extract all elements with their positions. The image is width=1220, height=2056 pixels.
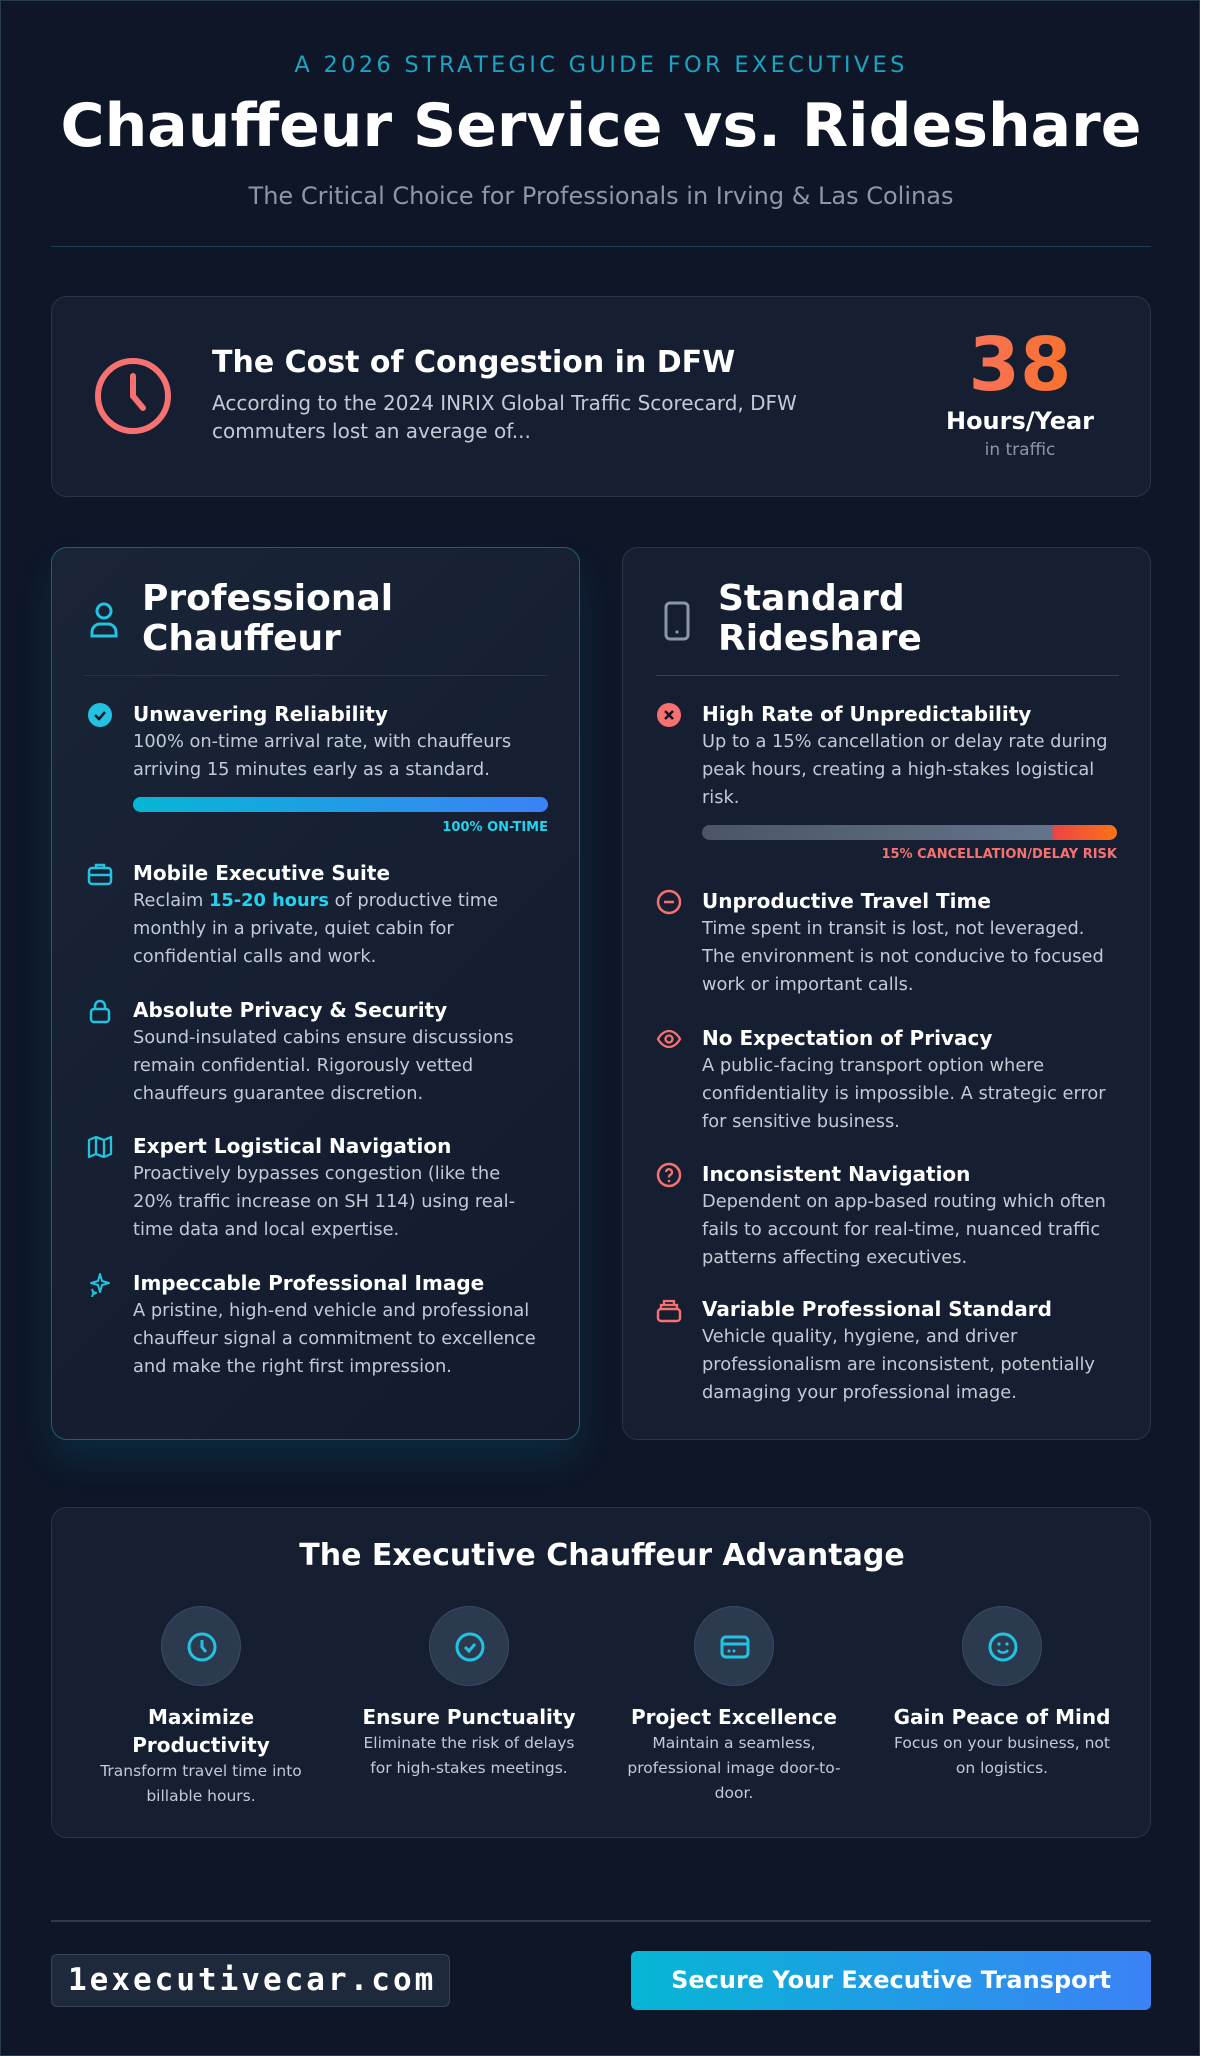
item: image: Impeccable Professional Image xyxy=(133,1271,484,1295)
heading: Rideshare xyxy=(718,618,922,659)
domain badge: 1executivecar.com xyxy=(68,1962,436,1998)
advantage: excellence: Maintain a seamless, professional image door-to-door. xyxy=(627,1734,841,1802)
icon: check circle xyxy=(429,1606,509,1686)
stat: 38 hours: in traffic xyxy=(985,440,1055,460)
item: privacy xyxy=(656,1026,1106,1132)
icon: smile xyxy=(962,1606,1042,1686)
domain badge xyxy=(51,1954,450,2007)
item: standard: Vehicle quality, hygiene, and driver professionalism are inconsistent, potentially damaging your professional image. xyxy=(702,1326,1095,1403)
title: Chauffeur Service vs. Rideshare xyxy=(61,91,1141,161)
item: mobile suite: Reclaim 15-20 hours of productive time monthly in a private, quiet cabin for confidential calls and work. xyxy=(133,890,498,967)
item: privacy: No Expectation of Privacy xyxy=(702,1026,992,1050)
panel: professional chauffeur xyxy=(51,547,580,1440)
stat: 38 hours: 38 xyxy=(968,322,1071,408)
panel: standard rideshare: 15% CANCELLATION/DELAY RISK xyxy=(881,847,1117,862)
advantage: peace of mind: Focus on your business, not on logistics. xyxy=(894,1734,1110,1777)
icon: person xyxy=(90,602,118,638)
advantage: productivity: Maximize xyxy=(148,1705,254,1729)
item: reliability xyxy=(88,702,548,835)
item: navigation: Inconsistent Navigation xyxy=(702,1162,970,1186)
item: image xyxy=(90,1271,536,1377)
panel: cost of congestion xyxy=(51,296,1151,497)
item: privacy: Absolute Privacy & Security xyxy=(133,998,447,1022)
stat: 38 hours: Hours/Year xyxy=(946,407,1094,435)
item: privacy: Sound-insulated cabins ensure discussions remain confidential. Rigorously vetted chauffeurs guarantee discretion. xyxy=(133,1027,514,1104)
advantage: punctuality: Ensure Punctuality xyxy=(362,1705,576,1729)
icon: clock circle xyxy=(161,1606,241,1686)
advantage: excellence: Project Excellence xyxy=(631,1705,837,1729)
kicker: A 2026 STRATEGIC GUIDE FOR EXECUTIVES xyxy=(294,52,908,78)
item: reliability: 100% on-time arrival rate, with chauffeurs arriving 15 minutes early as a standard. xyxy=(133,731,511,780)
advantage: peace of mind xyxy=(894,1705,1110,1777)
heading: The Cost of Congestion in DFW xyxy=(212,345,735,380)
stat: 38 hours xyxy=(946,322,1094,460)
item: reliability: Unwavering Reliability xyxy=(133,702,388,726)
item: navigation xyxy=(88,1134,515,1240)
item: travel time: Unproductive Travel Time xyxy=(702,889,991,913)
heading: The Executive Chauffeur Advantage xyxy=(299,1538,905,1573)
text: According to the 2024 INRIX Global Traffic Scorecard, DFW commuters lost an average of... xyxy=(212,391,797,443)
heading: Professional xyxy=(142,578,393,619)
risk bar xyxy=(702,825,1117,840)
item: unpredictability xyxy=(657,702,1118,862)
item: travel time: Time spent in transit is lost, not leveraged. The environment is not conducive to focused work or important calls. xyxy=(702,918,1104,995)
item: navigation xyxy=(656,1162,1106,1268)
progress bar xyxy=(133,797,548,812)
item: mobile suite: Mobile Executive Suite xyxy=(133,861,390,885)
cta button xyxy=(631,1951,1151,2010)
item: image: A pristine, high-end vehicle and professional chauffeur signal a commitment to excellence and make the right first impression. xyxy=(133,1300,536,1377)
panel: standard rideshare xyxy=(622,547,1151,1440)
item: navigation: Dependent on app-based routing which often fails to account for real-time, nuanced traffic patterns affecting executives. xyxy=(702,1191,1106,1268)
advantage: peace of mind: Gain Peace of Mind xyxy=(894,1705,1110,1729)
item: navigation: Proactively bypasses congestion (like the 20% traffic increase on SH 114) using real-time data and local expertise. xyxy=(133,1163,515,1240)
panel: professional chauffeur: 100% ON-TIME xyxy=(442,820,548,835)
heading: Standard xyxy=(718,578,905,619)
heading: Chauffeur xyxy=(142,618,341,659)
item: privacy xyxy=(90,998,514,1104)
item: privacy: A public-facing transport option where confidentiality is impossible. A strategic error for sensitive business. xyxy=(702,1055,1106,1132)
icon: clock xyxy=(95,358,171,434)
item: unpredictability: High Rate of Unpredictability xyxy=(702,702,1031,726)
advantage: punctuality xyxy=(362,1705,576,1777)
icon: phone xyxy=(664,602,690,640)
heading xyxy=(142,578,393,659)
item: navigation: Expert Logistical Navigation xyxy=(133,1134,451,1158)
advantage: productivity: Transform travel time into billable hours. xyxy=(100,1762,302,1805)
icon: card xyxy=(694,1606,774,1686)
advantage: productivity xyxy=(100,1705,302,1805)
panel: executive advantage xyxy=(51,1507,1151,1838)
subtitle: The Critical Choice for Professionals in Irving & Las Colinas xyxy=(249,182,953,210)
item: mobile suite xyxy=(88,861,498,967)
item: unpredictability: Up to a 15% cancellation or delay rate during peak hours, creating a high-stakes logistical risk. xyxy=(702,731,1108,808)
advantage: punctuality: Eliminate the risk of delays for high-stakes meetings. xyxy=(364,1734,574,1777)
item: travel time xyxy=(656,889,1104,995)
item: standard xyxy=(656,1297,1095,1403)
advantage: productivity: Productivity xyxy=(132,1733,270,1757)
cta button: Secure Your Executive Transport xyxy=(671,1966,1111,1994)
item: standard: Variable Professional Standard xyxy=(702,1297,1052,1321)
heading xyxy=(718,578,922,659)
